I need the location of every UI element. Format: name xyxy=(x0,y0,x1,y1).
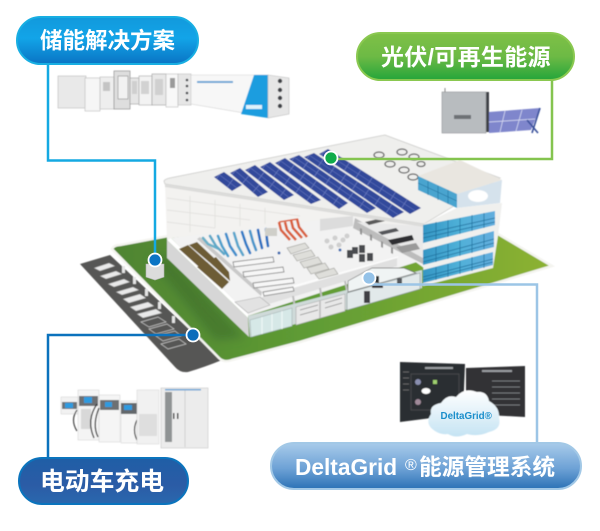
roof lower slab edge xyxy=(165,184,424,227)
stacked cabinets xyxy=(287,243,338,279)
rooftop fans xyxy=(374,149,425,180)
parked cars xyxy=(94,263,162,318)
solar panels xyxy=(214,149,421,218)
DeltaGrid screens and cloud xyxy=(400,362,525,436)
road with parking xyxy=(80,255,222,372)
dot: EV xyxy=(186,328,200,342)
empty parking bays xyxy=(141,317,186,349)
pill: EV charging: 电动车充电 xyxy=(40,468,164,496)
building scene xyxy=(80,135,552,372)
green ground xyxy=(112,234,552,361)
facade with glass bands xyxy=(423,203,502,286)
dot: solar xyxy=(324,152,338,164)
roof xyxy=(164,135,500,224)
pill: DeltaGrid: DeltaGrid xyxy=(295,454,397,480)
blue equipment rows xyxy=(203,229,268,256)
interior walls xyxy=(167,216,423,318)
grey units beside red equipment xyxy=(265,228,277,236)
EV chargers product xyxy=(61,388,208,448)
white machine rows xyxy=(233,257,294,296)
screen right xyxy=(466,366,525,417)
pill: DeltaGrid xyxy=(271,443,581,489)
connector: DeltaGrid xyxy=(369,284,537,443)
building left wall face xyxy=(167,240,249,337)
brown battery racks xyxy=(179,242,230,289)
cloud xyxy=(428,390,500,436)
connector: energy storage xyxy=(48,65,155,258)
pill: solar xyxy=(357,33,574,80)
small machines xyxy=(324,234,350,250)
pill: energy storage xyxy=(17,17,198,64)
red equipment xyxy=(279,219,307,240)
dark cube units xyxy=(278,245,373,262)
grass shadow xyxy=(150,256,245,340)
pill: solar: 光伏/可再生能源 xyxy=(381,44,551,70)
connector: solar xyxy=(331,80,552,159)
interior floor xyxy=(171,216,423,316)
back wall with brick lines xyxy=(165,184,424,268)
pill: DeltaGrid: 能源管理系统 xyxy=(419,454,555,480)
pill: DeltaGrid: ® xyxy=(405,457,417,474)
DeltaGrid cloud label: DeltaGrid® xyxy=(440,411,493,422)
pill: EV charging xyxy=(19,458,188,504)
front glass wall xyxy=(248,268,422,337)
energy storage product xyxy=(58,71,289,118)
storage cabinet on site xyxy=(146,264,164,280)
dot: DeltaGrid xyxy=(362,272,376,284)
screen left xyxy=(400,362,465,422)
connector: EV charging xyxy=(48,335,193,458)
pill: energy storage: 储能解决方案 xyxy=(40,28,176,54)
penthouse block xyxy=(418,160,502,208)
charging posts xyxy=(122,266,175,323)
solar inverter product xyxy=(442,88,540,133)
dot: storage xyxy=(146,254,164,280)
server rooms on right xyxy=(365,218,420,253)
